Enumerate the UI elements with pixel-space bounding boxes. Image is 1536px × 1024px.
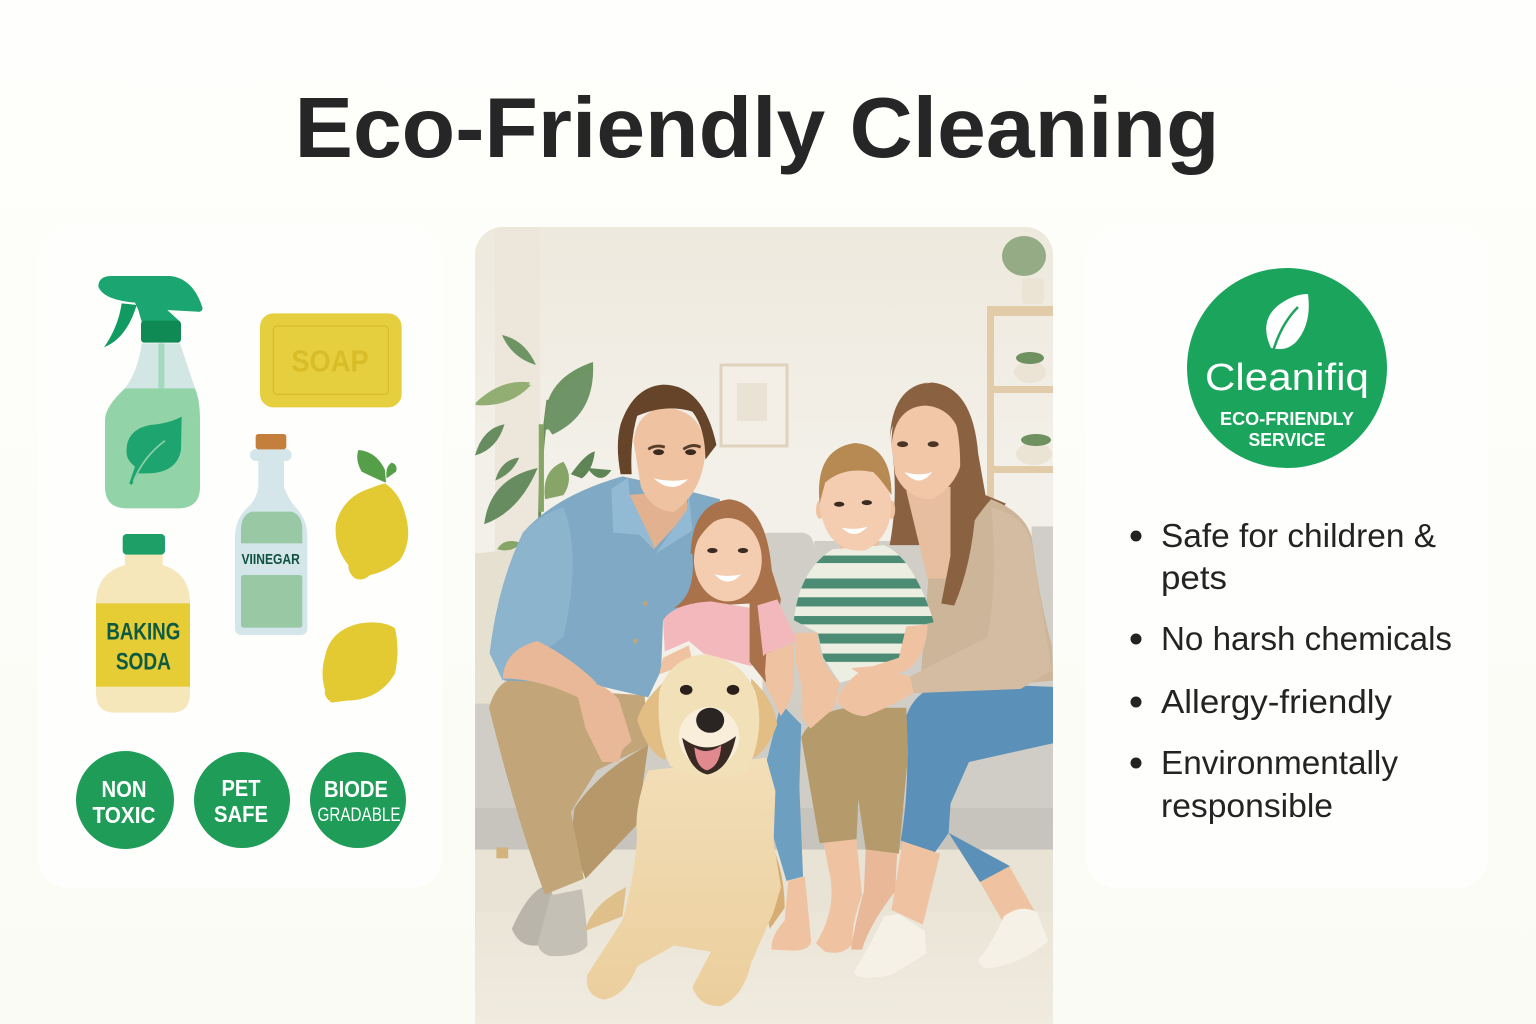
icon: lemon with leaf — [336, 450, 408, 579]
icon: lemon — [322, 622, 397, 703]
badge: biodegradable: BIODE — [324, 776, 388, 802]
golden retriever — [586, 654, 785, 1006]
icon: vinegar bottle — [235, 434, 307, 635]
boy — [788, 443, 936, 953]
bullet: safe for children and pets: Safe for children & — [1161, 517, 1436, 554]
icon: baking soda bottle: SODA — [116, 648, 171, 675]
badge: non toxic: TOXIC — [92, 802, 156, 828]
icon: soap bar — [260, 313, 402, 407]
floor and rug — [475, 847, 1053, 1024]
bullet: safe for children and pets — [1130, 517, 1436, 596]
woman — [855, 383, 1053, 978]
logo badge: Cleanifiq — [1187, 268, 1387, 468]
bullet: environmentally responsible: Environmentally — [1161, 744, 1398, 781]
bullet: environmentally responsible: responsible — [1161, 787, 1333, 824]
panel: cleaning products — [38, 226, 442, 888]
photo: family with dog on sofa — [475, 227, 1053, 1024]
icon: baking soda bottle: BAKING — [106, 618, 180, 645]
plant lower leaves — [475, 370, 611, 551]
logo badge: Cleanifiq: SERVICE — [1248, 430, 1326, 450]
badge: pet safe: PET — [222, 775, 260, 801]
badge: biodegradable: GRADABLE — [318, 805, 400, 826]
badge: pet safe — [194, 752, 290, 848]
logo badge: Cleanifiq: ECO-FRIENDLY — [1220, 409, 1354, 429]
girl — [659, 499, 811, 951]
benefits list — [1130, 517, 1452, 824]
plant upper leaves — [475, 335, 594, 518]
title: Eco-Friendly Cleaning — [294, 81, 1220, 176]
icon: soap bar: SOAP — [291, 345, 369, 379]
sofa — [475, 526, 1053, 877]
icon: leaf — [1266, 294, 1309, 355]
badge: pet safe: SAFE — [214, 801, 268, 827]
woman's arm and hands — [838, 666, 1031, 716]
bullet: no harsh chemicals: No harsh chemicals — [1161, 620, 1452, 657]
panel: service benefits — [1086, 226, 1488, 888]
icon: spray bottle — [98, 276, 203, 508]
badge: non toxic: NON — [102, 776, 146, 802]
bullet: allergy-friendly: Allergy-friendly — [1161, 683, 1393, 720]
bullet: safe for children and pets: pets — [1161, 559, 1227, 596]
icon: baking soda bottle — [96, 534, 190, 713]
picture frame — [721, 365, 787, 446]
shelf — [987, 236, 1053, 526]
badge: non toxic — [76, 751, 174, 849]
bullet: environmentally responsible — [1130, 744, 1398, 824]
icon: vinegar bottle: VIINEGAR — [241, 552, 300, 568]
logo badge: Cleanifiq: Cleanifiq — [1205, 357, 1369, 399]
badge: biodegradable — [310, 752, 406, 848]
man — [489, 385, 720, 956]
